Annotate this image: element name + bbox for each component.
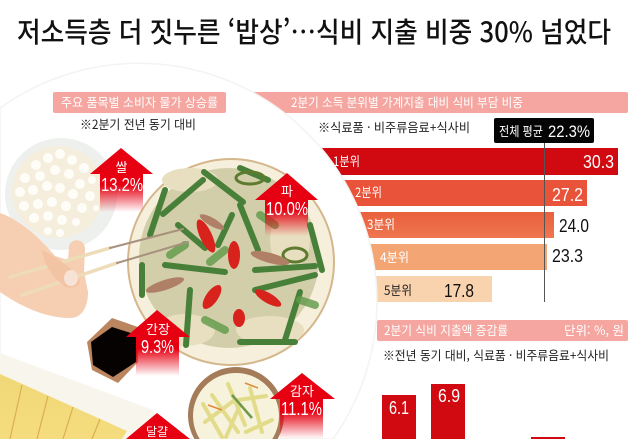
quintile labels and values: 24.0 — [559, 216, 589, 236]
arrow: soy sauce 9.3% — [126, 310, 190, 376]
bar: 4th quintile — [340, 244, 547, 270]
arrow: potato 11.1%: 감자 — [290, 381, 314, 400]
note: price basis: ※2분기 전년 동기 대비 — [80, 114, 196, 133]
bar: 6.9 — [431, 384, 465, 439]
quintile labels and values: 2분위 — [355, 182, 382, 201]
bar chart: spending change — [382, 384, 565, 439]
average line — [544, 143, 546, 302]
arrow: green onion 10.0% — [255, 173, 318, 236]
quintile labels and values: 23.3 — [552, 246, 583, 266]
arrow: potato 11.1% — [270, 373, 335, 439]
icon: seasoned potato bowl — [188, 367, 284, 439]
callout: overall average: 22.3% — [548, 122, 590, 141]
bar: 6.9: 6.9 — [438, 386, 460, 406]
header: spending change — [377, 320, 628, 341]
bar chart: food burden by income quintile — [300, 148, 618, 302]
panel: white food circle — [0, 63, 377, 439]
quintile labels and values: 5분위 — [384, 280, 412, 299]
arrow: soy sauce 9.3%: 9.3% — [141, 337, 174, 357]
icon: green onion pancake — [127, 158, 335, 366]
arrow: rice 13.2%: 쌀 — [116, 157, 128, 176]
bar: 1st quintile — [300, 148, 618, 175]
quintile labels and values: 1분위 — [333, 151, 360, 170]
callout: overall average: 전체 평균 — [499, 121, 543, 140]
header: consumer price rise: 주요 품목별 소비자 물가 상승률 — [61, 92, 218, 111]
quintile labels and values — [333, 151, 614, 301]
icon: soy sauce dish — [87, 318, 138, 383]
arrow: rice 13.2% — [90, 148, 153, 212]
quintile labels and values: 3분위 — [367, 214, 395, 233]
arrow: egg — [126, 413, 190, 439]
arrow: green onion 10.0%: 파 — [281, 181, 293, 200]
header: income quintile food burden — [210, 92, 628, 113]
bar: 6.1 — [382, 395, 416, 439]
bar: 6.1: 6.1 — [389, 398, 409, 418]
arrow: green onion 10.0%: 10.0% — [266, 199, 308, 219]
header: spending change: 2분기 식비 지출액 증감률 — [384, 320, 508, 339]
bar: 2nd quintile — [320, 180, 587, 206]
callout: overall average — [494, 118, 594, 143]
note: food burden basis: ※식료품 · 비주류음료+식사비 — [318, 117, 470, 136]
bar: 5th quintile — [350, 276, 492, 302]
header: spending change: 단위: %, 원 — [564, 320, 624, 339]
arrow: potato 11.1%: 11.1% — [281, 399, 322, 419]
quintile labels and values: 27.2 — [552, 185, 583, 205]
icon: hand with chopsticks — [0, 213, 188, 318]
quintile labels and values: 17.8 — [444, 281, 474, 301]
quintile labels and values: 4분위 — [380, 247, 409, 266]
quintile labels and values: 30.3 — [583, 152, 614, 172]
bar: third — [531, 437, 565, 439]
arrow: rice 13.2%: 13.2% — [101, 175, 143, 195]
note: spending change basis: ※전년 동기 대비, 식료품 · 비주류음료+식사비 — [383, 345, 609, 364]
bar: 3rd quintile — [330, 212, 554, 238]
header: income quintile food burden: 2분기 소득 분위별 가계지출 대비 식비 부담 비중 — [291, 92, 523, 111]
icon: rice bowl — [5, 138, 117, 250]
icon: rolled omelette — [0, 353, 172, 439]
arrow: soy sauce 9.3%: 간장 — [146, 319, 170, 338]
